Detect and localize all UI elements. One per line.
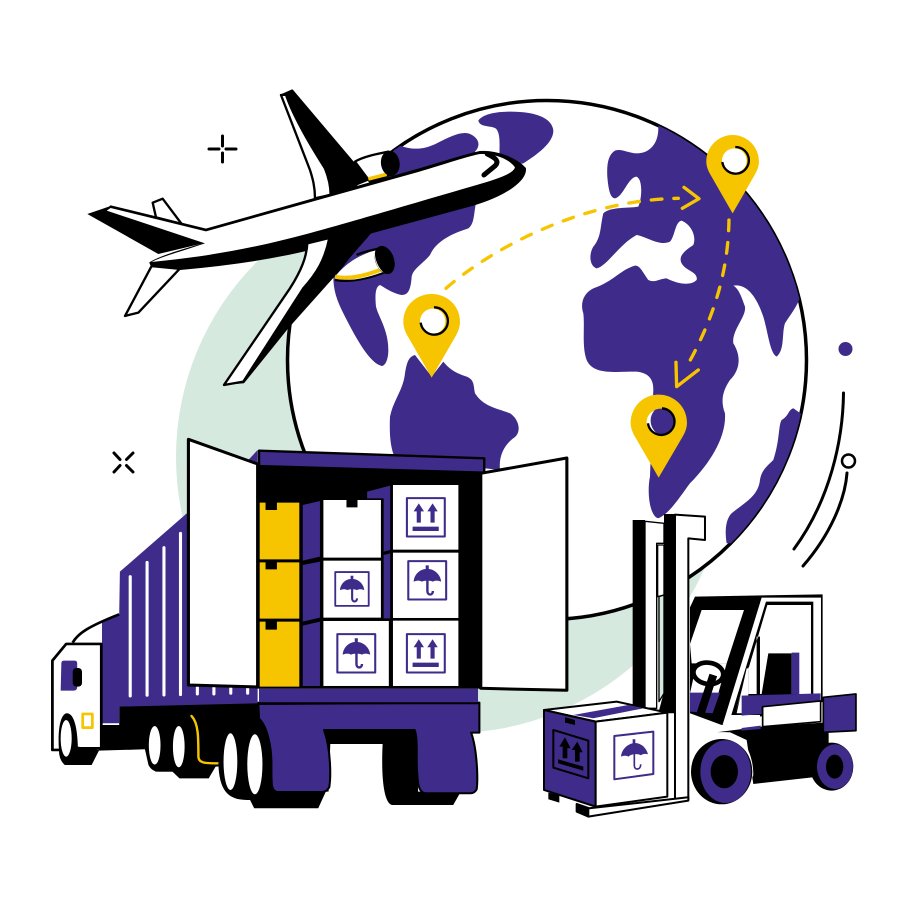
cargo box (544, 702, 667, 807)
container underside black (321, 728, 461, 805)
background circle (176, 181, 728, 733)
airplane (87, 90, 525, 385)
pin: lower (631, 395, 687, 478)
fender (689, 728, 753, 783)
forklift (544, 514, 856, 817)
mast (633, 514, 705, 800)
tailplanes (87, 199, 206, 316)
handling icon: keep dry right (408, 561, 446, 599)
front wheel (59, 713, 99, 765)
arrowhead: upper pin (682, 187, 699, 208)
handling icon: keep dry lower (337, 634, 375, 672)
truck (52, 439, 567, 808)
side icon: this way up (553, 730, 588, 778)
far engine (355, 149, 401, 182)
decoration: ring (842, 454, 855, 468)
rear wheel (810, 743, 853, 791)
middle wheels (144, 713, 216, 778)
right door (481, 458, 567, 690)
near engine (335, 243, 398, 281)
container roof (259, 451, 484, 473)
handling icon: keep dry (335, 572, 369, 606)
front icon: keep dry (614, 732, 653, 779)
container base (258, 689, 479, 793)
left door (188, 439, 258, 687)
sparkle: plus (209, 136, 236, 162)
box side panels (303, 486, 390, 686)
trailer side (102, 512, 258, 723)
illustration: global logistics (51, 89, 857, 818)
front wheel (691, 739, 752, 804)
pin: left (403, 294, 460, 378)
cab frame (690, 594, 823, 725)
truck cab (52, 614, 119, 750)
yellow boxes (260, 503, 299, 687)
rear wheels (218, 720, 326, 808)
pallet (548, 793, 688, 817)
white boxes (323, 485, 458, 686)
globe disc (288, 100, 806, 620)
near wing (223, 233, 372, 385)
flight routes (446, 187, 729, 387)
cable (192, 716, 219, 763)
handling icon: this way up lower (407, 634, 445, 672)
globe (288, 100, 823, 620)
arrowhead: lower pin (676, 362, 698, 387)
counterweight (823, 694, 856, 732)
container interior (248, 450, 484, 689)
far wing (281, 90, 368, 198)
steering wheel (692, 661, 725, 713)
sparkle: cross (114, 453, 133, 472)
white panel (763, 701, 821, 727)
pin: upper right (706, 135, 759, 213)
fuselage (106, 152, 525, 269)
handling icon: this way up (407, 498, 445, 536)
rear frame body (717, 723, 829, 784)
decoration: dot (838, 342, 852, 356)
continents (333, 112, 823, 543)
truck chassis (99, 702, 274, 778)
route: dashed arc to lower pin (687, 220, 729, 367)
route: dashed arc to upper pin (446, 198, 678, 288)
decoration: motion arcs (794, 393, 847, 566)
